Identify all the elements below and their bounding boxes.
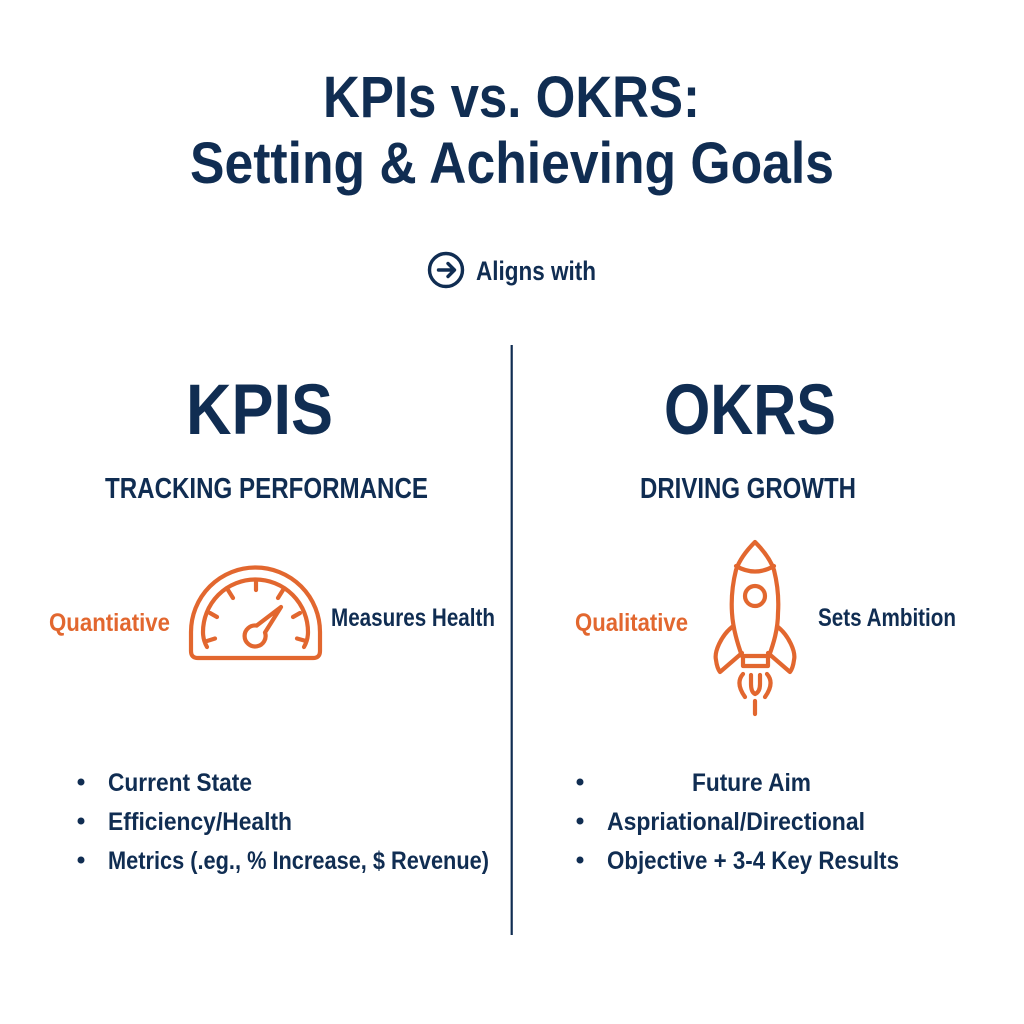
icon: rocket <box>716 542 794 714</box>
OKRs bullet list <box>576 769 899 875</box>
divider <box>511 345 513 935</box>
OKRs subheading: DRIVING GROWTH <box>640 473 856 505</box>
label: qualitative: Qualitative <box>575 609 688 637</box>
title: KPIs vs. OKRS: <box>323 65 700 130</box>
label text: Aligns with <box>476 256 596 286</box>
icon: arrow in circle <box>430 254 462 286</box>
OKRs bullet list: Future Aim <box>692 769 811 797</box>
OKRs heading: OKRS <box>664 371 836 450</box>
aligns with label <box>430 254 596 286</box>
OKRs bullet list: Objective + 3-4 Key Results <box>607 847 899 875</box>
KPIs heading: KPIS <box>186 371 333 450</box>
KPIs subheading: TRACKING PERFORMANCE <box>105 473 428 505</box>
label: quantitative: Quantiative <box>49 609 170 637</box>
KPIs bullet list: Efficiency/Health <box>108 808 292 836</box>
KPIs bullet list: Current State <box>108 769 252 797</box>
panel: OKRs <box>575 371 956 875</box>
label: sets ambition: Sets Ambition <box>818 604 956 632</box>
title <box>190 65 834 196</box>
title: Setting & Achieving Goals <box>190 131 834 196</box>
label: measures health: Measures Health <box>331 604 495 632</box>
panel: KPIs <box>49 371 495 875</box>
KPIs bullet list: Metrics (.eg., % Increase, $ Revenue) <box>108 847 489 875</box>
OKRs bullet list: Aspriational/Directional <box>607 808 865 836</box>
KPIs bullet list <box>78 769 489 875</box>
icon: speedometer gauge <box>191 568 320 658</box>
